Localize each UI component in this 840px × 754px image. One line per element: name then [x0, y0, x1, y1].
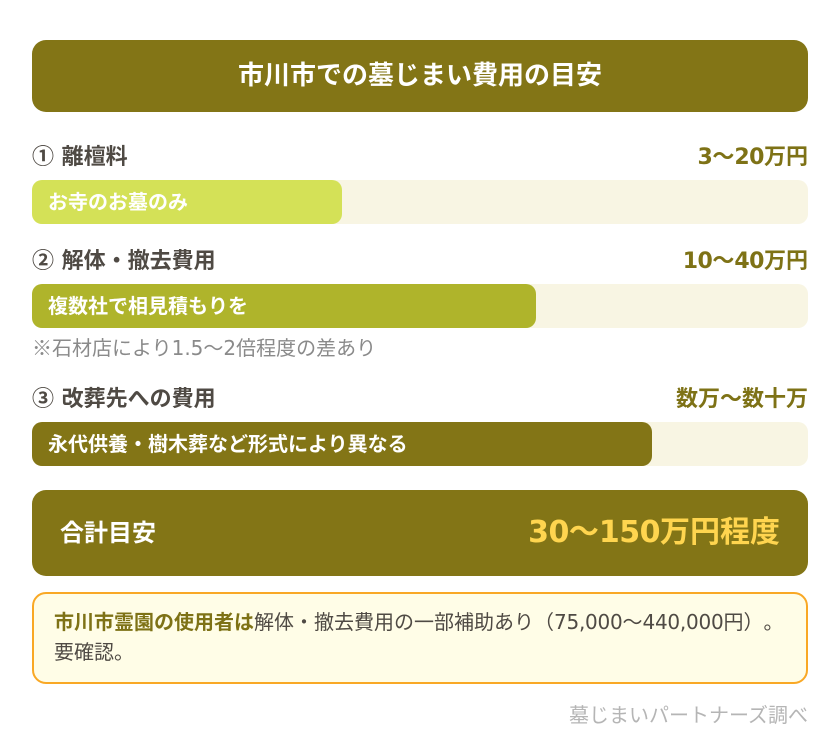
source credit: 墓じまいパートナーズ調べ — [569, 703, 808, 727]
item 3 label: ③ 改葬先への費用 — [32, 381, 216, 413]
total label: 合計目安 — [60, 519, 156, 547]
item 1 bar fill: お寺のお墓のみ — [48, 190, 188, 214]
item 1 amount: 3〜20万円 — [698, 145, 808, 170]
item 2 bar fill: 複数社で相見積もりを — [48, 294, 248, 318]
item 2 note: ※石材店により1.5〜2倍程度の差あり — [32, 332, 376, 361]
item 3 bar fill — [32, 422, 652, 466]
item 3 bar — [32, 422, 808, 466]
item 2 bar fill — [32, 284, 536, 328]
item 1 bar fill — [32, 180, 342, 224]
title banner: 市川市での墓じまい費用の目安 — [238, 61, 602, 91]
item 2 bar — [32, 284, 808, 328]
subsidy callout — [32, 592, 808, 684]
item 3 bar fill: 永代供養・樹木葬など形式により異なる — [48, 432, 408, 456]
total amount: 30〜150万円程度 — [528, 515, 780, 550]
item 1 bar — [32, 180, 808, 224]
item 2 label: ② 解体・撤去費用 — [32, 243, 216, 275]
total panel — [32, 490, 808, 576]
item 3 amount: 数万〜数十万 — [676, 387, 808, 412]
callout text: 市川市霊園の使用者は解体・撤去費用の一部補助あり（75,000〜440,000円）。要確認。 — [54, 610, 783, 664]
title banner — [32, 40, 808, 112]
item 1 label: ① 離檀料 — [32, 139, 128, 171]
item 2 amount: 10〜40万円 — [683, 249, 808, 274]
